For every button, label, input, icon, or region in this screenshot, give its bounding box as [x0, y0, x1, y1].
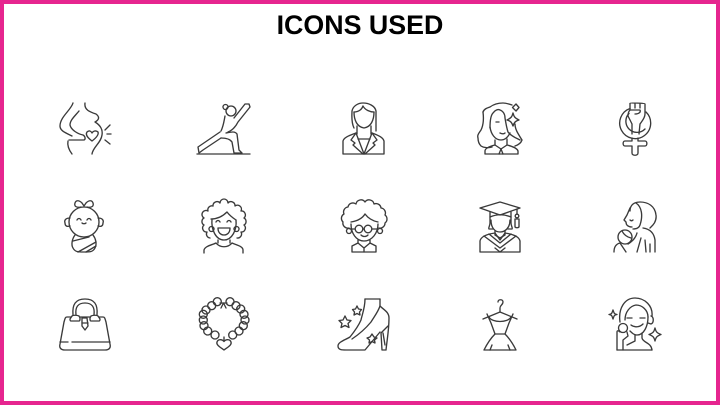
icon: mother in hijab holding baby [614, 202, 656, 252]
icon: elderly woman with glasses [341, 200, 387, 252]
icon: graduate with cap [480, 202, 520, 252]
icon: woman with sparkles [478, 103, 522, 154]
title: ICONS USED [277, 10, 443, 40]
icon: businesswoman [343, 103, 384, 154]
icon: feminist fist symbol [620, 103, 651, 155]
icon: handbag [60, 299, 110, 350]
icon: woman applying skincare with sparkles [609, 298, 661, 350]
icon: pregnant woman [60, 103, 111, 154]
icon: curly haired woman laughing [202, 199, 246, 253]
icon: swaddled baby girl [65, 201, 103, 252]
icon: dress on hanger [483, 300, 517, 350]
icon: pearl bracelet with heart [199, 298, 249, 350]
icon: yoga pose [197, 104, 250, 154]
icon: high heel with stars [338, 299, 389, 350]
